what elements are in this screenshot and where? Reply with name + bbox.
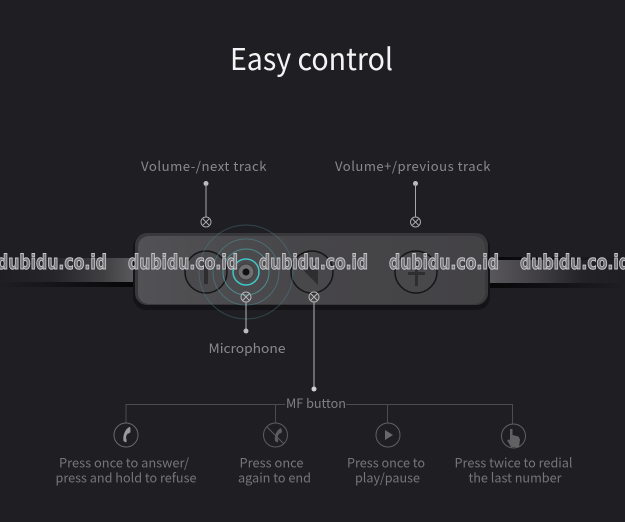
MF bracket lines bbox=[126, 404, 512, 424]
leader: MF button bbox=[309, 292, 319, 392]
caption: end: Press once bbox=[240, 452, 304, 472]
leader: volume up bbox=[410, 181, 420, 227]
label: volume down: Volume-/next track bbox=[141, 156, 267, 175]
leader: microphone bbox=[241, 292, 251, 334]
left cable bbox=[0, 258, 136, 287]
caption: answer: Press once to answer/ bbox=[59, 452, 189, 472]
watermark: dubidu.co.id bbox=[259, 250, 368, 274]
label: volume up: Volume+/previous track bbox=[335, 156, 491, 175]
caption: redial: Press twice to redial bbox=[455, 452, 573, 472]
label: microphone: Microphone bbox=[208, 338, 286, 357]
caption: redial: the last number bbox=[468, 468, 562, 486]
icon: tap hand bbox=[502, 424, 526, 448]
icon: answer call bbox=[114, 423, 138, 447]
caption: end: again to end bbox=[238, 468, 311, 486]
label: MF button: MF button bbox=[286, 393, 346, 412]
button: volume down bbox=[185, 251, 227, 293]
caption: play/pause: play/pause bbox=[355, 468, 420, 486]
watermark: dubidu.co.id bbox=[0, 250, 107, 274]
button: volume up bbox=[395, 251, 437, 293]
leader: volume down bbox=[201, 181, 211, 227]
button: MF bbox=[291, 251, 333, 293]
microphone with sound rings bbox=[199, 225, 293, 319]
title: Easy control bbox=[230, 35, 393, 79]
caption: answer: press and hold to refuse bbox=[56, 468, 196, 486]
right cable bbox=[486, 257, 625, 288]
remote control body bbox=[133, 233, 490, 310]
watermark: dubidu.co.id bbox=[389, 250, 499, 274]
icon: play/pause bbox=[376, 423, 400, 447]
icon: end call bbox=[264, 423, 288, 447]
watermark bbox=[0, 250, 625, 274]
caption: play/pause: Press once to bbox=[347, 452, 425, 472]
watermark: dubidu.co.id bbox=[128, 250, 238, 274]
